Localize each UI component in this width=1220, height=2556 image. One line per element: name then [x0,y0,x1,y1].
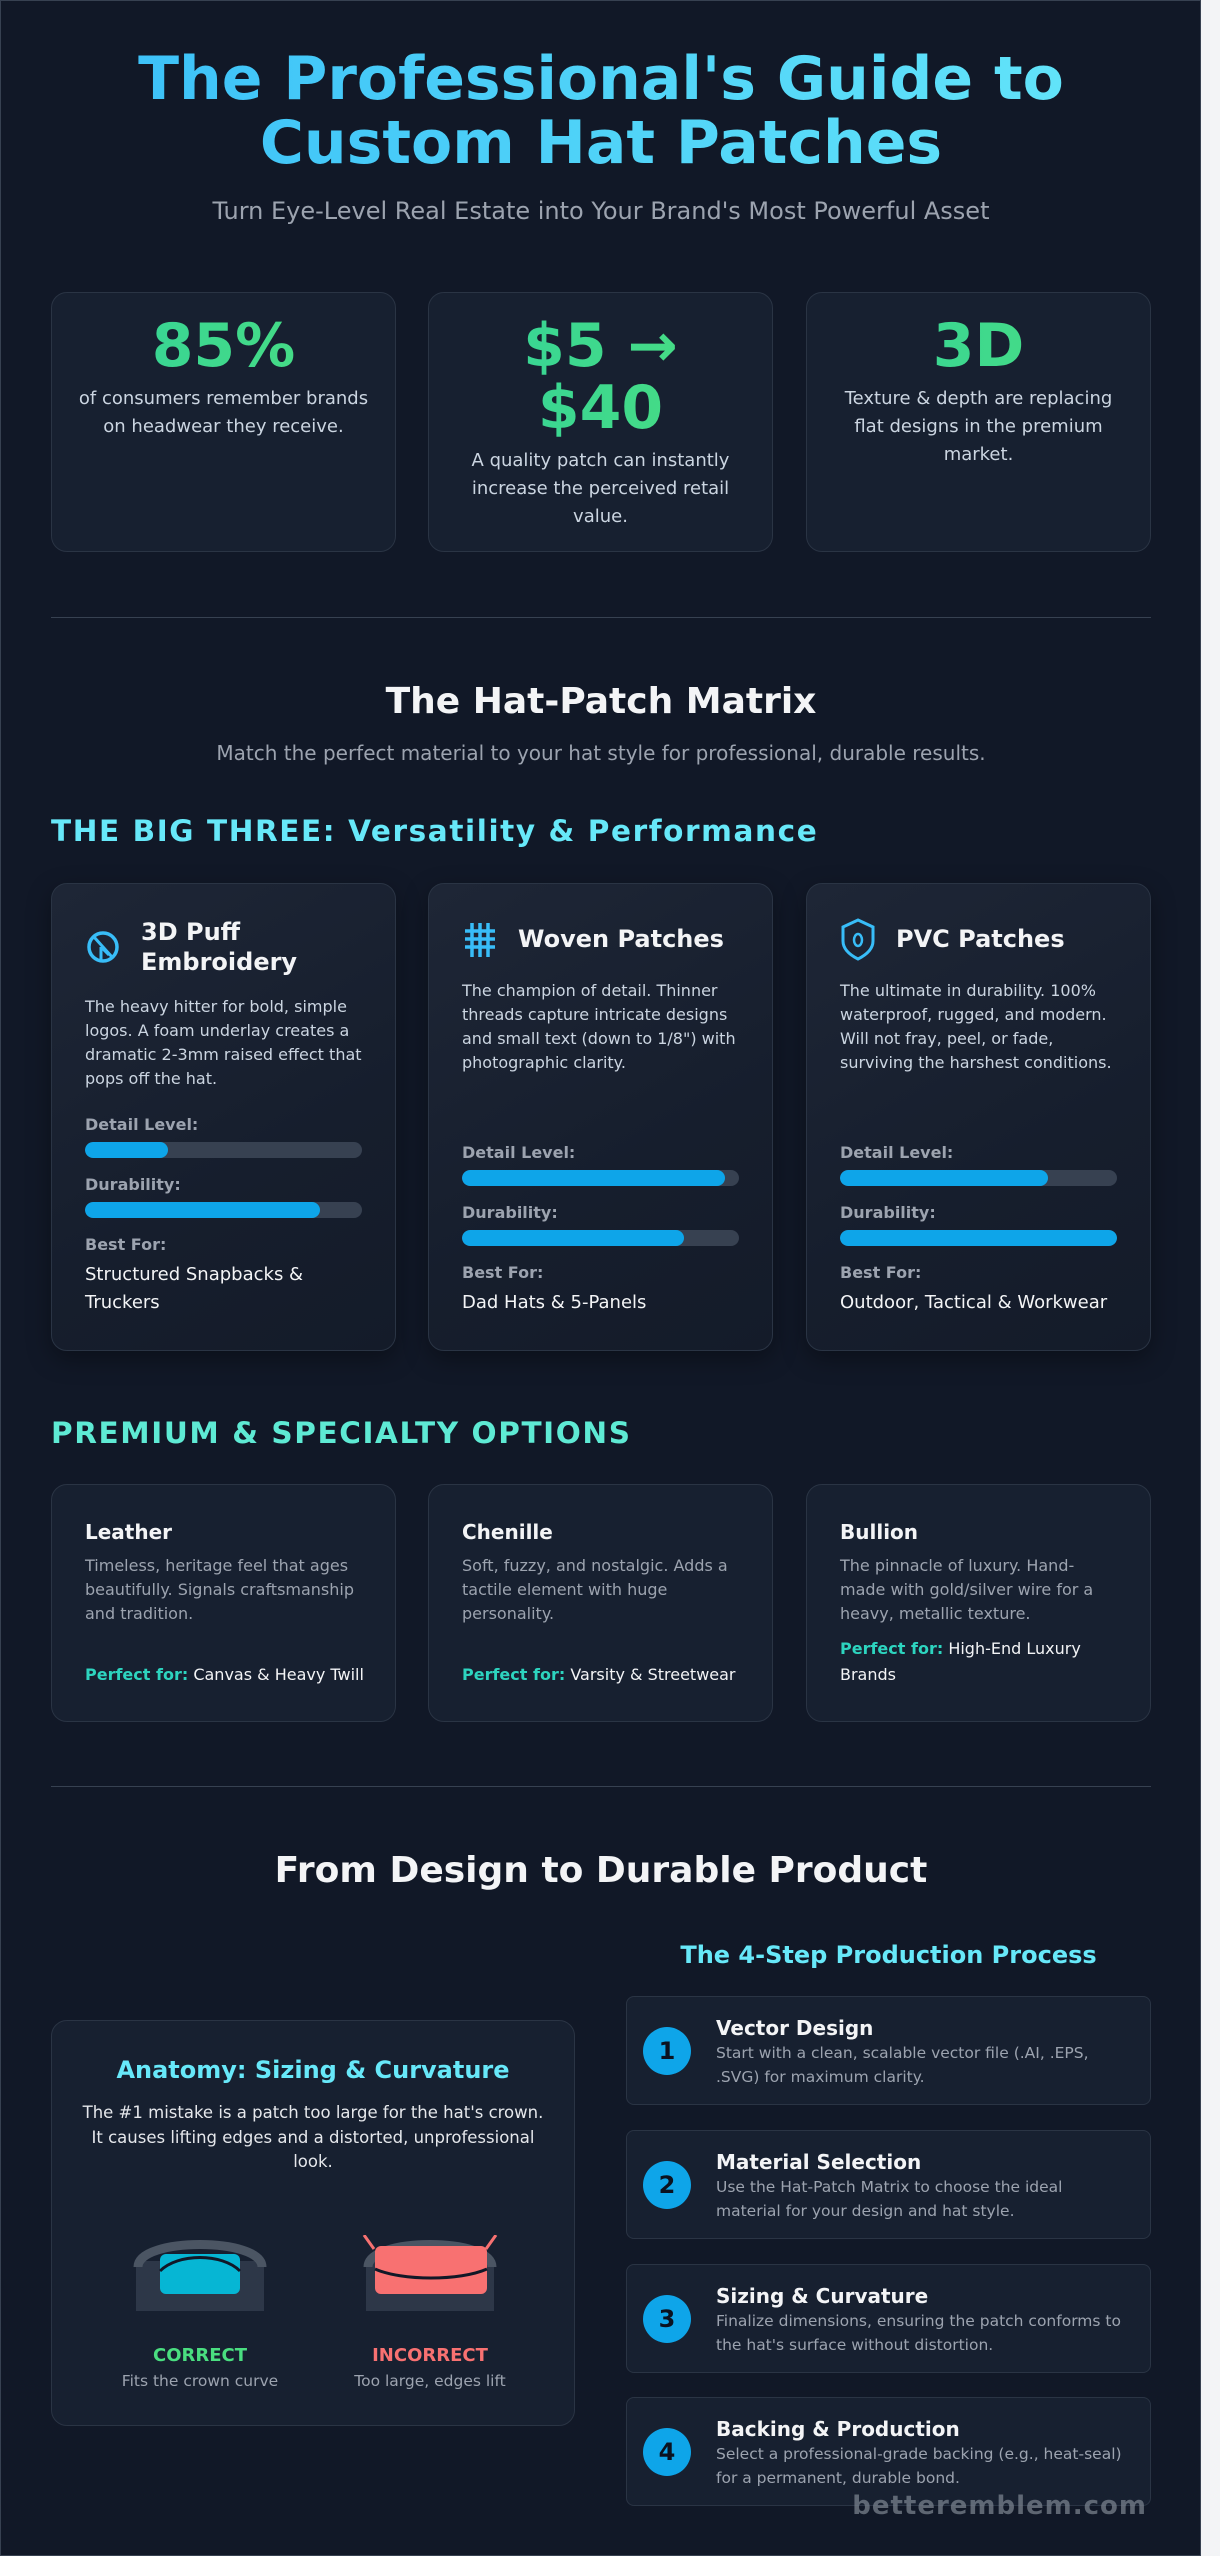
step 4: for a permanent, durable bond. [716,2469,960,2487]
card header [87,918,297,976]
step 1: 1 [659,2037,675,2065]
panel: chenille: Soft, fuzzy, and nostalgic. Adds a tactile element with huge personality. [462,1556,728,1623]
description: The ultimate in durability. 100% waterproof, rugged, and modern. Will not fray, peel, or fade, surviving the harshest conditions. [840,981,1112,1072]
step 2 [626,2130,1151,2239]
label: incorrect: INCORRECT [372,2345,488,2366]
step 2: 2 [659,2171,675,2199]
subtitle: Turn Eye-Level Real Estate into Your Brand's Most Powerful Asset [212,197,989,225]
card header: Embroidery [141,948,297,976]
anatomy heading: Anatomy: Sizing & Curvature [116,2056,510,2084]
stat number: 85% [152,311,295,381]
stat number [837,315,1120,377]
panel: leather: Leather [85,1520,172,1544]
step 1: Start with a clean, scalable vector file (.AI, .EPS, [716,2044,1089,2062]
icon: correct hat [134,2240,266,2311]
stat card: 85% [51,292,396,552]
icon: puff [87,931,119,963]
step 3: Finalize dimensions, ensuring the patch conforms to [716,2312,1121,2330]
label: incorrect [354,2345,506,2390]
step 2: Use the Hat-Patch Matrix to choose the ideal [716,2178,1062,2196]
panel: woven patches [428,883,773,1351]
ratings: Structured Snapbacks & Truckers [85,1264,303,1313]
label: correct: CORRECT [153,2345,247,2366]
section heading: big three: THE BIG THREE: Versatility & Performance [51,814,818,848]
ratings: Best For: [85,1235,166,1254]
card header: Woven Patches [518,925,724,953]
stat number: 3D [933,311,1024,381]
stat description: Texture & depth are replacing flat designs in the premium market. [845,388,1112,465]
heading: 4-step process: The 4-Step Production Process [680,1941,1097,1969]
stat card: 3D [806,292,1151,552]
step 3: 3 [659,2305,675,2333]
panel: leather [51,1484,396,1722]
ratings: Detail Level: [85,1115,198,1134]
panel: bullion: Bullion [840,1520,918,1544]
ratings: Detail Level: [840,1143,953,1162]
stat card: $5 to $40 [428,292,773,552]
anatomy text: The #1 mistake is a patch too large for the hat's crown. It causes lifting edges and a distorted, unprofessional look. [83,2103,543,2171]
step 2: Material Selection [716,2150,921,2174]
title: The Professional's Guide to [138,44,1064,114]
icon: shield [842,918,874,961]
heading: design to product: From Design to Durable Product [275,1850,927,1891]
stat description: A quality patch can instantly increase the perceived retail value. [472,450,729,527]
step 1 [626,1996,1151,2105]
panel: chenille [428,1484,773,1722]
panel: bullion [806,1484,1151,1722]
section heading: premium: PREMIUM & SPECIALTY OPTIONS [51,1416,632,1450]
ratings [840,1143,1117,1313]
title: Custom Hat Patches [260,108,942,178]
card header: 3D Puff [141,918,240,946]
step 3: the hat's surface without distortion. [716,2336,993,2354]
ratings [462,1143,739,1313]
stat number: $5 → [523,311,678,381]
stat number [76,315,371,377]
stat description: of consumers remember brands on headwear they receive. [79,388,368,437]
step 1: .SVG) for maximum clarity. [716,2068,925,2086]
description: The champion of detail. Thinner threads capture intricate designs and small text (down to 1/8") with photographic clarity. [462,981,736,1072]
matrix subtitle: Match the perfect material to your hat style for professional, durable results. [216,741,986,765]
ratings: Best For: [462,1263,543,1282]
step 4 [626,2397,1151,2506]
panel: chenille: Chenille [462,1520,553,1544]
card header [842,918,1065,961]
panel: chenille: Perfect for: Varsity & Streetwear [462,1665,736,1684]
step 3 [626,2264,1151,2373]
icon: woven grid [465,923,495,957]
ratings: Durability: [840,1203,936,1222]
ratings [84,1115,362,1313]
step 4: 4 [659,2438,675,2466]
icon: incorrect hat [362,2235,498,2311]
ratings: Dad Hats & 5-Panels [462,1292,646,1313]
step 4: Backing & Production [716,2417,960,2441]
panel: leather: Perfect for: Canvas & Heavy Twill [85,1665,364,1684]
ratings: Best For: [840,1263,921,1282]
watermark: betteremblem.com [852,2491,1147,2521]
step 3: Sizing & Curvature [716,2284,928,2308]
panel: anatomy [51,2020,575,2426]
label: correct: Fits the crown curve [122,2372,278,2390]
ratings: Detail Level: [462,1143,575,1162]
panel: bullion: Perfect for: High-End Luxury Brands [840,1639,1081,1684]
ratings: Durability: [85,1175,181,1194]
label: correct [122,2345,278,2390]
panel: bullion: The pinnacle of luxury. Hand-made with gold/silver wire for a heavy, metallic texture. [840,1556,1093,1623]
card header [465,923,724,957]
step 1: Vector Design [716,2016,873,2040]
panel: 3D puff embroidery [51,883,396,1351]
step 2: material for your design and hat style. [716,2202,1014,2220]
ratings: Outdoor, Tactical & Workwear [840,1292,1107,1313]
label: incorrect: Too large, edges lift [354,2372,506,2390]
card header: PVC Patches [896,925,1065,953]
panel: leather: Timeless, heritage feel that ages beautifully. Signals craftsmanship and tradition. [85,1556,354,1623]
stat number: $40 [538,373,663,443]
step 4: Select a professional-grade backing (e.g., heat-seal) [716,2445,1122,2463]
description: The heavy hitter for bold, simple logos. A foam underlay creates a dramatic 2-3mm raised effect that pops off the hat. [85,997,362,1088]
stat number [453,315,748,439]
heading: hat-patch matrix: The Hat-Patch Matrix [386,681,816,722]
ratings: Durability: [462,1203,558,1222]
panel: PVC patches [806,883,1151,1351]
title [1,47,1201,175]
